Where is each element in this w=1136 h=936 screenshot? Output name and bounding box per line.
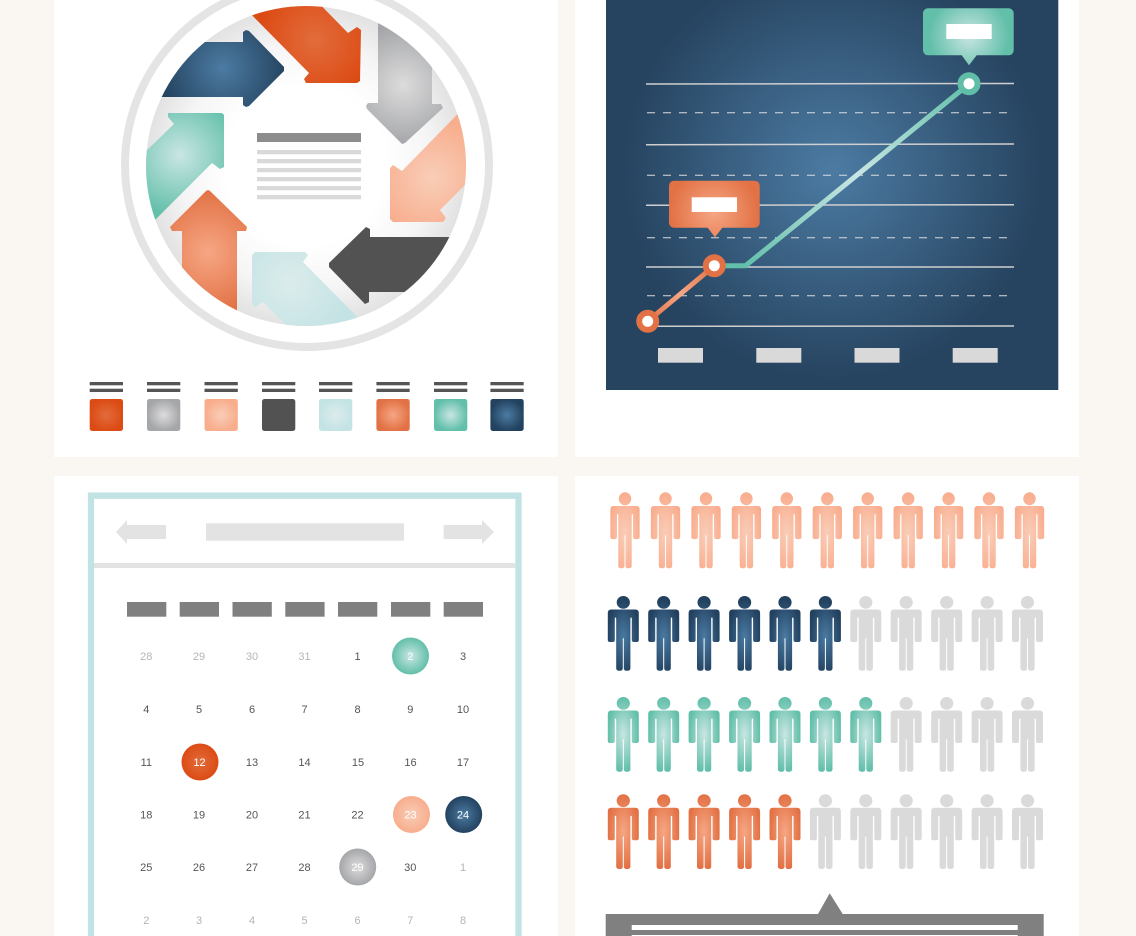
arrow: dark gray xyxy=(329,227,450,304)
people row: orange, 5 of 11 xyxy=(608,794,1043,869)
month title bar xyxy=(206,523,404,541)
calendar dates: 7 xyxy=(301,704,308,716)
calendar dates: 5 xyxy=(196,704,202,716)
calendar dates: 21 xyxy=(298,810,311,822)
header divider xyxy=(94,563,515,568)
center text block xyxy=(257,133,361,199)
calendar dates: 10 xyxy=(457,704,469,716)
calendar dates: 8 xyxy=(354,704,361,716)
calendar dates: 9 xyxy=(407,704,413,716)
panel: people pictograms xyxy=(575,476,1079,936)
calendar dates: 8 xyxy=(460,915,466,927)
weekday headers xyxy=(127,602,483,617)
marker: start xyxy=(639,313,656,330)
calendar dates: 2 xyxy=(143,915,149,927)
panel: calendar xyxy=(54,476,558,936)
circular arrows xyxy=(146,6,466,326)
calendar dates: 28 xyxy=(140,651,152,663)
arrow: light teal xyxy=(252,252,358,326)
legend item: peach xyxy=(204,382,238,431)
calendar dates: 3 xyxy=(196,915,202,927)
calendar dates: 14 xyxy=(298,757,311,769)
legend item: light teal xyxy=(319,382,352,431)
calendar dates: 30 xyxy=(404,862,416,874)
calendar dates: 11 xyxy=(141,757,152,769)
calendar dates: 13 xyxy=(246,757,258,769)
caption box with pointer xyxy=(606,893,1044,936)
people row: peach, 11 of 11 xyxy=(610,492,1044,568)
legend item: navy xyxy=(490,382,524,431)
calendar dates: 4 xyxy=(143,704,149,716)
axis labels xyxy=(658,348,998,363)
calendar dates: 12 xyxy=(193,757,206,769)
arrow: peach xyxy=(390,114,466,222)
calendar dates: 27 xyxy=(246,862,258,874)
calendar dates: 6 xyxy=(249,704,255,716)
calendar dates: 18 xyxy=(140,810,152,822)
arrow: next xyxy=(444,520,494,544)
callout: orange xyxy=(669,181,760,237)
calendar dates: 2 xyxy=(407,651,413,663)
trend line: teal xyxy=(714,84,969,266)
legend item: gray xyxy=(147,382,180,431)
legend item: dark gray xyxy=(262,382,295,431)
legend item: orange xyxy=(376,382,410,431)
people row: teal, 7 of 11 xyxy=(608,697,1043,772)
trend line: orange xyxy=(648,266,714,321)
arrow: teal xyxy=(146,113,224,220)
marker: middle xyxy=(706,257,723,274)
calendar frame xyxy=(91,496,518,936)
calendar dates: 1 xyxy=(460,862,466,874)
marker: end xyxy=(960,75,978,92)
inner disc xyxy=(146,6,466,326)
calendar dates: 7 xyxy=(407,915,413,927)
calendar dates: 19 xyxy=(193,810,205,822)
calendar dates: 29 xyxy=(351,862,364,874)
calendar dates: 1 xyxy=(354,651,361,663)
arrow: navy xyxy=(162,30,284,107)
calendar dates: 5 xyxy=(301,915,308,927)
date highlight circles xyxy=(182,638,482,886)
calendar dates xyxy=(140,651,469,927)
calendar dates: 24 xyxy=(457,810,469,822)
calendar dates: 6 xyxy=(354,915,361,927)
panel: arrow cycle and legend xyxy=(54,0,558,457)
callout: teal xyxy=(923,8,1014,65)
arrow: red xyxy=(252,6,361,83)
calendar dates: 3 xyxy=(460,651,466,663)
calendar dates: 29 xyxy=(193,651,205,663)
calendar dates: 25 xyxy=(140,862,152,874)
calendar dates: 15 xyxy=(352,757,364,769)
calendar dates: 4 xyxy=(249,915,255,927)
legend xyxy=(90,382,524,431)
calendar dates: 23 xyxy=(404,810,417,822)
outer ring xyxy=(125,0,489,347)
chart background xyxy=(606,0,1058,390)
calendar dates: 26 xyxy=(193,862,205,874)
arrow: gray xyxy=(366,10,443,144)
legend item: red xyxy=(90,382,123,431)
calendar dates: 31 xyxy=(298,651,311,663)
calendar dates: 16 xyxy=(404,757,417,769)
arrow: orange xyxy=(170,190,247,310)
calendar dates: 17 xyxy=(457,757,469,769)
people row: navy, 6 of 11 xyxy=(608,596,1043,671)
calendar dates: 20 xyxy=(246,810,258,822)
legend item: teal xyxy=(434,382,467,431)
calendar dates: 30 xyxy=(246,651,258,663)
panel: line chart xyxy=(575,0,1079,457)
arrow: previous xyxy=(116,520,166,544)
calendar dates: 22 xyxy=(351,810,364,822)
calendar dates: 28 xyxy=(298,862,311,874)
